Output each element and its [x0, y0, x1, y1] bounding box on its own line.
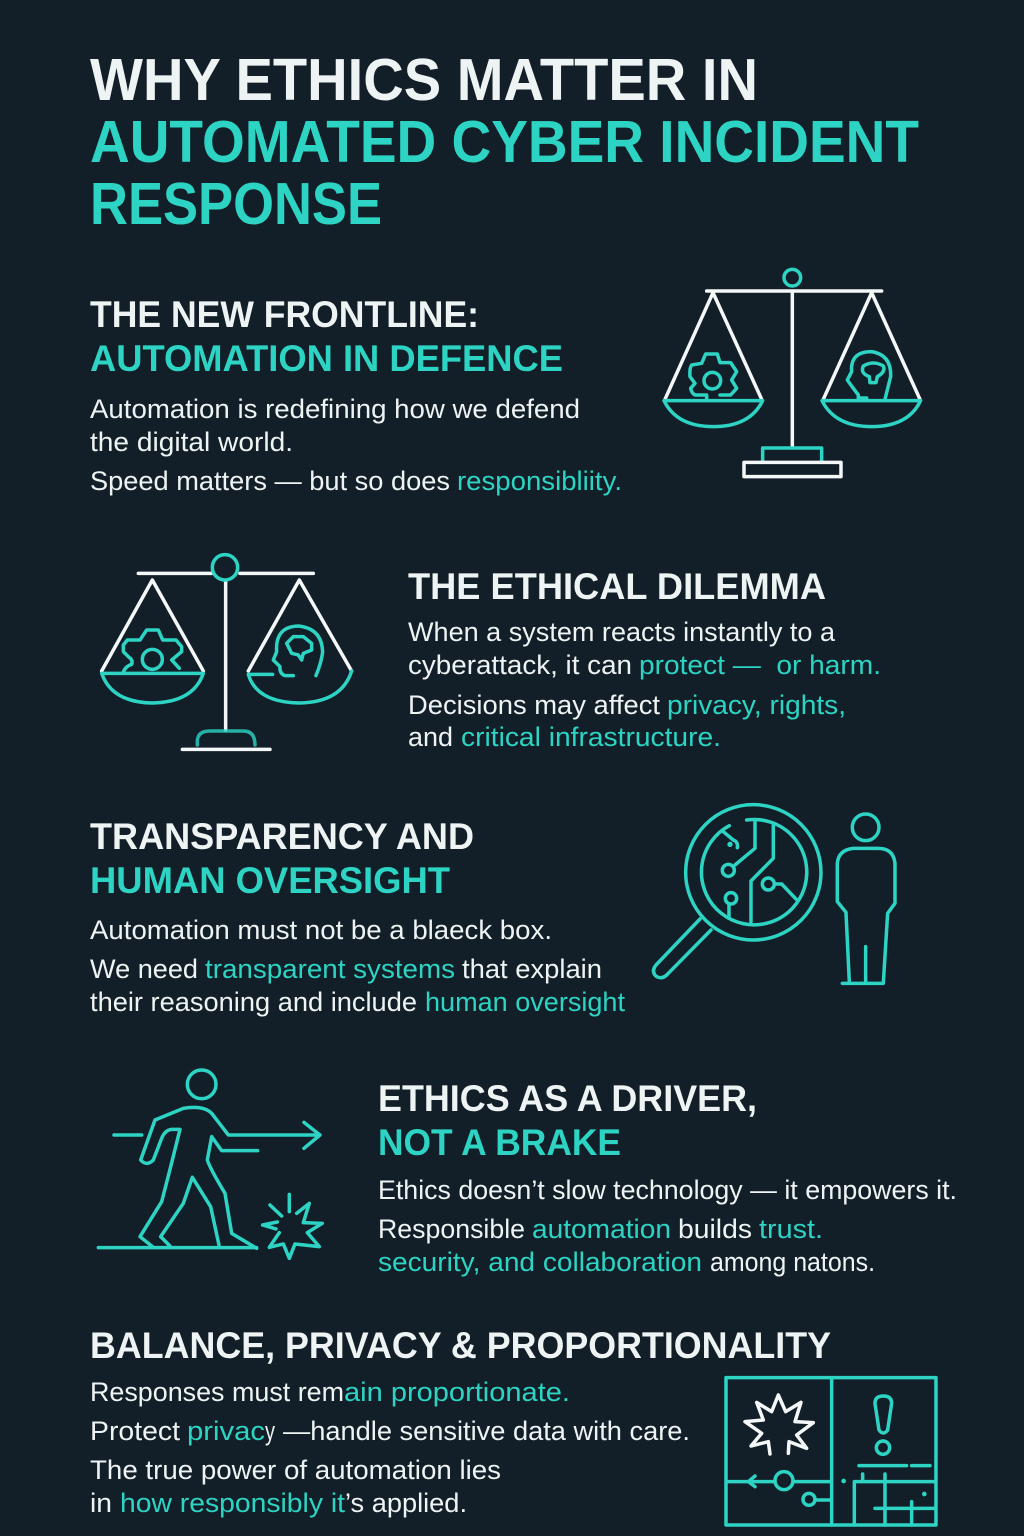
text block: dilemma explanation: protect — or harm. — [639, 650, 881, 680]
text block: proportional responses: Responses must rem — [90, 1377, 344, 1407]
title: RESPONSE — [90, 171, 382, 237]
text block: proportional responses: Protect — [90, 1416, 181, 1446]
text block: dilemma explanation: When a system reacts instantly to a — [408, 617, 836, 647]
text block: ethics empowers: Responsible — [378, 1214, 525, 1244]
text block: dilemma explanation: critical infrastructure. — [461, 722, 721, 752]
heading: balance, privacy and proportionality: BALANCE, PRIVACY & PROPORTIONALITY — [90, 1325, 831, 1366]
text block: automation intro: responsibliity. — [457, 466, 622, 496]
heading: ethics as a driver: NOT A BRAKE — [378, 1122, 621, 1163]
text block: ethics empowers: among natons. — [710, 1247, 875, 1277]
text block: proportional responses: —handle sensitive data with care. — [283, 1416, 690, 1446]
text block: dilemma explanation: and — [408, 722, 453, 752]
text block: ethics empowers: security, and collaboration — [378, 1247, 702, 1277]
text block: transparency explanation: their reasoning and include — [90, 987, 417, 1017]
heading: ethics as a driver — [378, 1078, 757, 1163]
text block: dilemma explanation: Decisions may affect — [408, 690, 660, 720]
text block: dilemma explanation: privacy, rights, — [667, 690, 846, 720]
heading: ethics as a driver: ETHICS AS A DRIVER, — [378, 1078, 757, 1119]
text block: proportional responses: y — [265, 1416, 275, 1446]
text block: transparency explanation: that explain — [462, 954, 602, 984]
heading: the new frontline — [90, 294, 563, 379]
text block: automation intro — [90, 394, 622, 496]
panel: the new frontline — [90, 269, 921, 496]
panel: ethics as a driver — [98, 1070, 957, 1277]
icon: scales with gear and head — [664, 269, 921, 477]
title: WHY ETHICS MATTER IN — [90, 47, 758, 113]
icon: control panel with burst and alert — [726, 1378, 936, 1525]
heading: transparency and human oversight: TRANSPARENCY AND — [90, 816, 474, 857]
text block: ethics empowers: trust. — [759, 1214, 823, 1244]
heading: transparency and human oversight: HUMAN OVERSIGHT — [90, 860, 450, 901]
text block: ethics empowers — [378, 1175, 957, 1277]
panel: balance, privacy and proportionality — [90, 1325, 936, 1525]
text block: dilemma explanation — [408, 617, 881, 752]
text block: transparency explanation: transparent systems — [205, 954, 455, 984]
panel: the ethical dilemma — [102, 555, 881, 752]
text block: proportional responses: ain proportionate. — [344, 1377, 570, 1407]
icon: walking figure with arrow and burst — [98, 1070, 322, 1258]
heading: the ethical dilemma: THE ETHICAL DILEMMA — [408, 566, 826, 607]
text block: ethics empowers: automation — [532, 1214, 671, 1244]
heading: the new frontline: AUTOMATION IN DEFENCE — [90, 338, 563, 379]
text block: transparency explanation: Automation must not be a blaeck box. — [90, 915, 552, 945]
text block: transparency explanation — [90, 915, 625, 1017]
panel: transparency and human oversight — [90, 805, 895, 1017]
icon: magnifying glass over circuit and person — [653, 805, 895, 983]
heading: transparency and human oversight — [90, 816, 474, 901]
icon: balance scale with round pivot — [102, 555, 352, 749]
text block: transparency explanation: human oversight — [425, 987, 625, 1017]
text block: dilemma explanation: cyberattack, it can — [408, 650, 632, 680]
title: AUTOMATED CYBER INCIDENT — [90, 109, 919, 175]
text block: proportional responses: in — [90, 1488, 112, 1518]
title — [90, 47, 919, 237]
text block: transparency explanation: We need — [90, 954, 198, 984]
text block: proportional responses — [90, 1377, 690, 1518]
text block: automation intro: Speed matters — but so does — [90, 466, 450, 496]
text block: ethics empowers: Ethics doesn’t slow technology — it empowers it. — [378, 1175, 957, 1205]
text block: proportional responses: how responsibly it — [120, 1488, 346, 1518]
text block: automation intro: Automation is redefining how we defend — [90, 394, 580, 424]
text block: proportional responses: ’s applied. — [345, 1488, 467, 1518]
text block: proportional responses: privac — [187, 1416, 265, 1446]
text block: automation intro: the digital world. — [90, 427, 293, 457]
text block: proportional responses: The true power of automation lies — [90, 1455, 501, 1485]
heading: the new frontline: THE NEW FRONTLINE: — [90, 294, 479, 335]
text block: ethics empowers: builds — [678, 1214, 752, 1244]
